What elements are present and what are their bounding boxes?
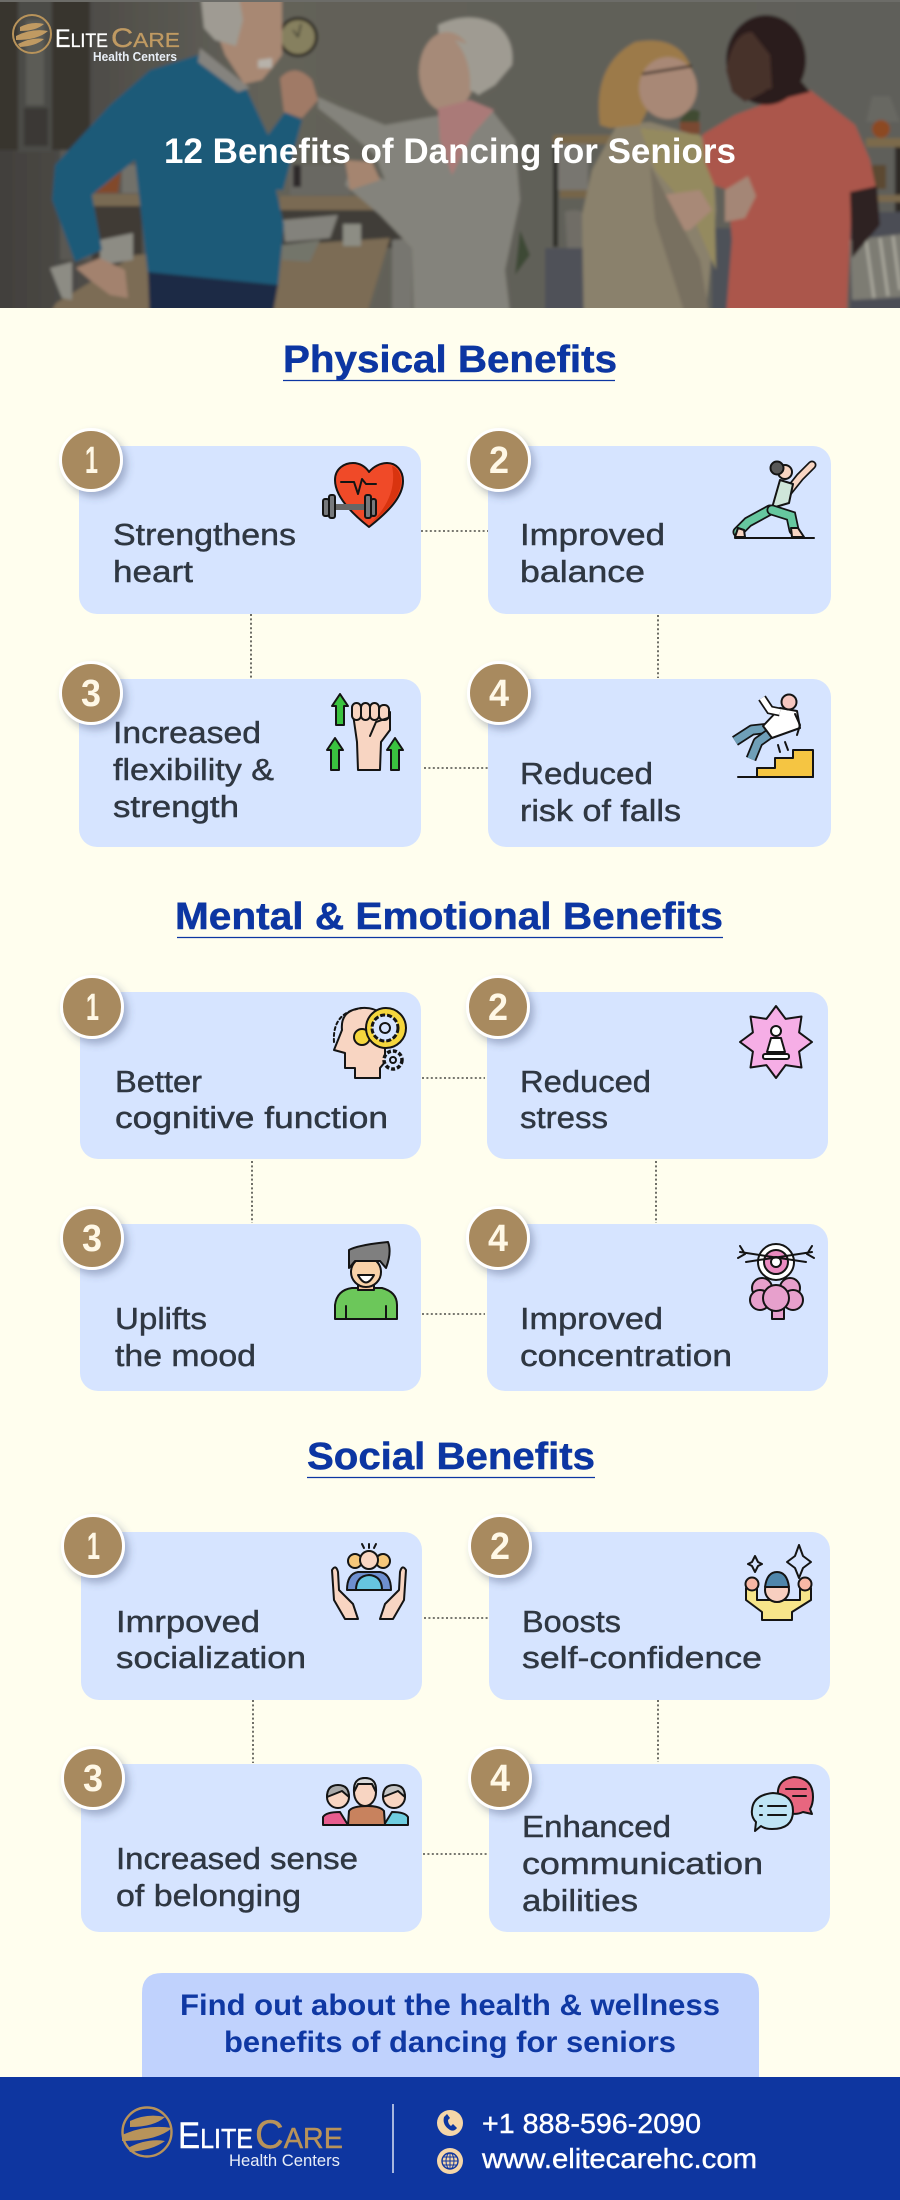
panel: better cognitive function — [80, 992, 421, 1159]
text: improved concentration: Improved — [520, 1301, 663, 1336]
logo: Elite Care footer: ELITE — [178, 2115, 253, 2156]
panel: strengthens heart — [79, 446, 421, 614]
text: imrpoved socialization — [116, 1604, 306, 1675]
icon: meditation lotus — [740, 1006, 812, 1078]
logo: Elite Care footer: CARE — [255, 2113, 343, 2157]
badge 3: 3 — [82, 1218, 102, 1260]
text: improved balance: balance — [520, 554, 645, 589]
text: imrpoved socialization: Imrpoved — [116, 1604, 260, 1639]
text: uplifts the mood: the mood — [115, 1338, 256, 1373]
badge 4: 4 — [490, 1758, 510, 1800]
badge 1 — [60, 430, 122, 490]
icon: head with gears — [334, 1008, 406, 1078]
text: reduced risk of falls — [520, 756, 681, 828]
text: boosts self-confidence: self-confidence — [522, 1640, 762, 1675]
text: better cognitive function: Better — [115, 1064, 202, 1099]
panel: uplifts the mood — [80, 1224, 421, 1391]
text: imrpoved socialization: socialization — [116, 1640, 306, 1675]
badge 3 — [62, 1208, 122, 1268]
badge 3 — [62, 1748, 124, 1808]
text: strengthens heart: Strengthens — [113, 517, 296, 552]
panel: improved concentration — [487, 1224, 828, 1391]
icon: smiling boy — [335, 1242, 397, 1319]
callout: find out more: Find out about the health & wellness — [180, 1989, 720, 2022]
badge 2 — [468, 976, 528, 1038]
person: man in blue sweater — [52, 0, 318, 330]
icon: brain target — [738, 1244, 814, 1319]
text: boosts self-confidence: Boosts — [522, 1604, 621, 1639]
badge 1: 1 — [85, 440, 98, 482]
text: uplifts the mood: Uplifts — [115, 1301, 207, 1336]
connectors: social — [253, 1618, 658, 1854]
icon: yoga pose — [735, 462, 814, 538]
text: reduced stress: Reduced — [520, 1064, 651, 1099]
panel: enhanced communication abilities — [489, 1764, 830, 1932]
title: 12 Benefits of Dancing for Seniors — [164, 132, 736, 171]
badge 1 — [62, 1516, 124, 1576]
heading: Social Benefits: Social Benefits — [307, 1436, 595, 1478]
text: increased flexibility — [113, 715, 274, 824]
footer band — [0, 2077, 900, 2200]
text: strengthens heart — [113, 517, 296, 589]
logo: Elite Care footer — [122, 2108, 343, 2170]
badge 3: 3 — [83, 1758, 103, 1800]
panel: boosts self-confidence — [489, 1532, 830, 1700]
person: man in coral shirt — [702, 15, 880, 330]
badge 3 — [60, 662, 122, 724]
person: woman in beige jacket — [582, 41, 716, 330]
text: improved concentration: concentration — [520, 1338, 732, 1373]
badge 4 — [470, 1748, 530, 1808]
text: enhanced communication abilities: communication — [522, 1846, 763, 1881]
text: boosts self-confidence — [522, 1604, 762, 1675]
badge 2 — [468, 430, 530, 490]
badge 3: 3 — [81, 673, 101, 715]
text: increased flexibility: Increased — [113, 715, 261, 750]
text: enhanced communication abilities: abilities — [522, 1883, 638, 1918]
icon: chat bubbles — [752, 1777, 813, 1831]
text: reduced risk of falls: risk of falls — [520, 793, 681, 828]
badge 2 — [470, 1516, 530, 1576]
text: uplifts the mood — [115, 1301, 256, 1373]
text: strengthens heart: heart — [113, 554, 193, 589]
text: reduced stress — [520, 1064, 651, 1135]
text: improved balance — [520, 517, 665, 589]
panel: increased flexibility and strength — [79, 679, 421, 847]
text: reduced risk of falls: Reduced — [520, 756, 653, 791]
panel: improved balance — [488, 446, 831, 614]
badge 2: 2 — [490, 1526, 510, 1568]
logo: Elite Care header: Health Centers — [93, 49, 177, 64]
badge 4 — [468, 662, 530, 724]
badge 2: 2 — [489, 440, 509, 482]
text: phone number: +1 888-596-2090 — [482, 2108, 701, 2139]
icon: hands holding group — [332, 1544, 406, 1619]
logo: Elite Care header: CARE — [111, 23, 180, 53]
badge 1: 1 — [87, 1526, 100, 1568]
panel: reduced stress — [487, 992, 828, 1159]
logo: Elite Care footer: Health Centers — [229, 2151, 340, 2170]
badge 4: 4 — [488, 1218, 508, 1260]
icon: person falling on stairs — [735, 694, 813, 777]
text: improved concentration — [520, 1301, 732, 1373]
panel: reduced risk of falls — [488, 679, 831, 847]
icon: heart with dumbbell — [323, 463, 403, 527]
badge 1: 1 — [86, 987, 99, 1029]
heading: Physical Benefits: Physical Benefits — [283, 339, 617, 381]
text: improved balance: Improved — [520, 517, 665, 552]
text: better cognitive function — [115, 1064, 388, 1135]
callout: find out more: benefits of dancing for seniors — [224, 2026, 676, 2059]
icon: globe — [437, 2148, 463, 2174]
text: website: www.elitecarehc.com — [481, 2143, 757, 2174]
icon: phone — [437, 2110, 463, 2136]
text: increased sense of belonging: of belonging — [116, 1878, 301, 1913]
badges: physical numbers — [60, 430, 530, 724]
badge 4 — [468, 1208, 528, 1268]
text: increased flexibility: flexibility & — [113, 752, 274, 787]
text: increased sense of belonging: Increased sense — [116, 1841, 358, 1876]
header photo: seniors dancing — [0, 0, 900, 330]
icon: cheering person — [746, 1545, 812, 1620]
icon: three elders — [323, 1778, 408, 1825]
connectors: physical — [251, 531, 658, 768]
badge 4: 4 — [489, 673, 509, 715]
icon: fist with arrows — [327, 694, 403, 770]
logo: Elite Care header: ELITE — [55, 25, 108, 53]
badge 1 — [62, 976, 122, 1038]
badges: mental numbers — [62, 976, 528, 1268]
badge 2: 2 — [488, 987, 508, 1029]
text: increased sense of belonging — [116, 1841, 358, 1913]
text: reduced stress: stress — [520, 1100, 608, 1135]
panel: increased sense of belonging — [81, 1764, 422, 1932]
logo: Elite Care header — [13, 15, 180, 64]
text: increased flexibility: strength — [113, 789, 239, 824]
panel: improved socialization — [81, 1532, 422, 1700]
text: enhanced communication abilities: Enhanced — [522, 1809, 671, 1844]
heading: Mental & Emotional Benefits: Mental & Emotional Benefits — [175, 896, 723, 938]
text: better cognitive function: cognitive function — [115, 1100, 388, 1135]
connectors: mental — [252, 1078, 656, 1314]
text: enhanced communication abilities — [522, 1809, 763, 1918]
callout: find out more — [142, 1973, 759, 2080]
person: woman in pale cardigan — [318, 18, 520, 330]
badges: social numbers — [62, 1516, 530, 1808]
